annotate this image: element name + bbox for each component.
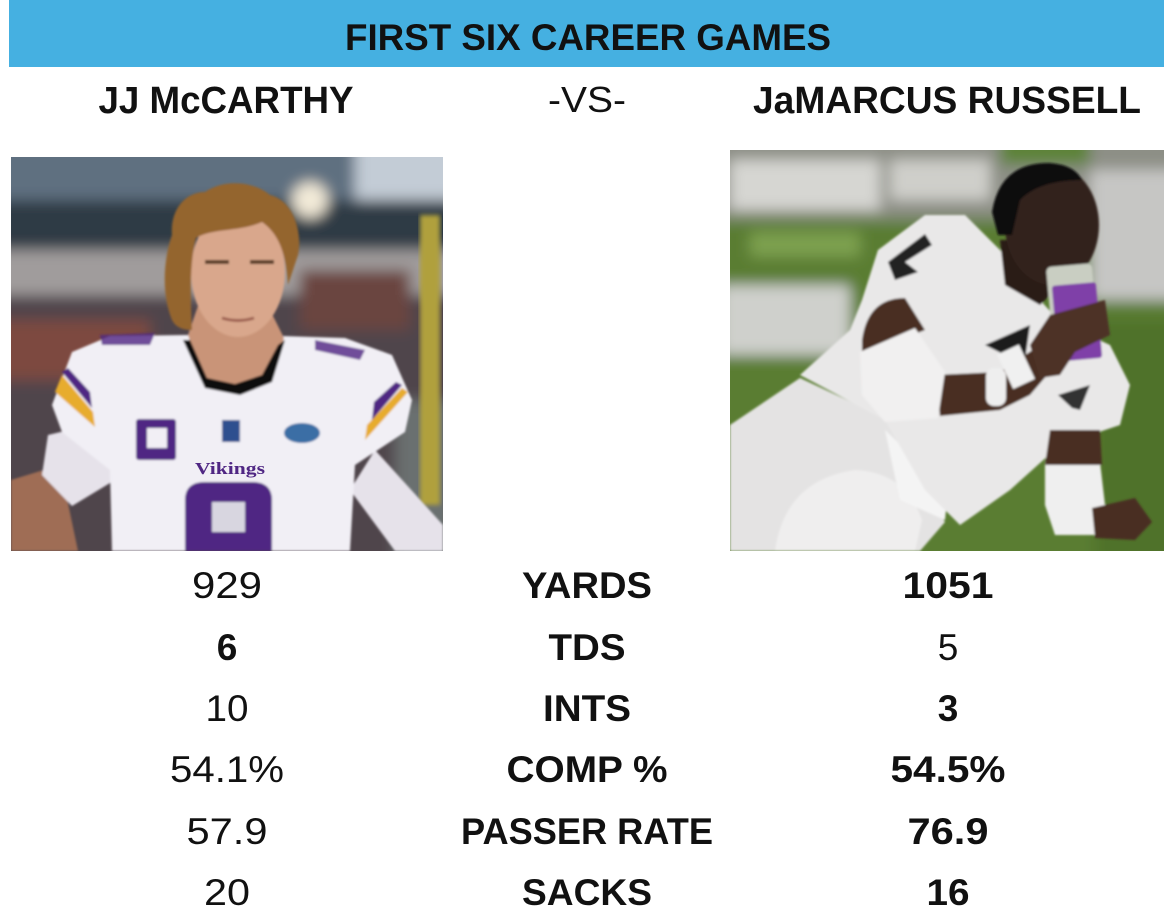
jersey — [52, 335, 412, 551]
row: interceptions: INTS — [543, 688, 631, 729]
captain patch — [136, 419, 176, 460]
title banner — [9, 0, 1164, 67]
row: yards — [192, 565, 994, 606]
row: completion percentage: COMP % — [506, 749, 668, 790]
row: sacks — [204, 872, 970, 913]
row: sacks: SACKS — [522, 872, 652, 913]
row: yards: 1051 — [902, 565, 994, 606]
jersey — [800, 215, 1130, 525]
row: completion percentage: 54.5% — [890, 749, 1006, 790]
jersey number 2 — [888, 234, 932, 280]
row: completion percentage — [170, 749, 1006, 790]
stats table — [170, 565, 1006, 913]
row: interceptions — [206, 688, 958, 729]
row: touchdowns — [217, 627, 958, 668]
heading: JaMarcus Russell: JaMARCUS RUSSELL — [753, 80, 1141, 122]
neck and head — [998, 238, 1050, 306]
lower arm and hand — [1045, 462, 1105, 535]
row: touchdowns: 6 — [217, 627, 237, 668]
row: passer rate: PASSER RATE — [461, 811, 713, 852]
row: passer rate — [186, 811, 988, 852]
photo: JJ McCarthy: Vikings — [195, 459, 265, 478]
neck and head — [187, 306, 285, 386]
row: passer rate: 57.9 — [186, 811, 268, 852]
row: yards: 929 — [192, 565, 262, 606]
row: sacks: 16 — [926, 872, 970, 913]
row: interceptions: 3 — [938, 688, 958, 729]
legs — [730, 378, 945, 551]
hand — [1030, 300, 1110, 378]
row: sacks: 20 — [204, 872, 250, 913]
photo: JaMarcus Russell — [730, 150, 1164, 551]
title banner: FIRST SIX CAREER GAMES — [345, 17, 831, 58]
row: completion percentage: 54.1% — [170, 749, 284, 790]
arms — [11, 465, 78, 551]
cup — [1044, 262, 1094, 316]
heading: versus: -VS- — [548, 79, 626, 120]
photo: JJ McCarthy — [11, 157, 443, 551]
row: yards: YARDS — [522, 565, 652, 606]
row: interceptions: 10 — [206, 688, 248, 729]
row: touchdowns: 5 — [938, 627, 958, 668]
arm — [862, 298, 925, 355]
heading: JJ McCarthy: JJ McCARTHY — [98, 80, 354, 122]
row: touchdowns: TDS — [548, 627, 626, 668]
row: passer rate: 76.9 — [908, 811, 988, 852]
jersey number — [185, 482, 272, 551]
